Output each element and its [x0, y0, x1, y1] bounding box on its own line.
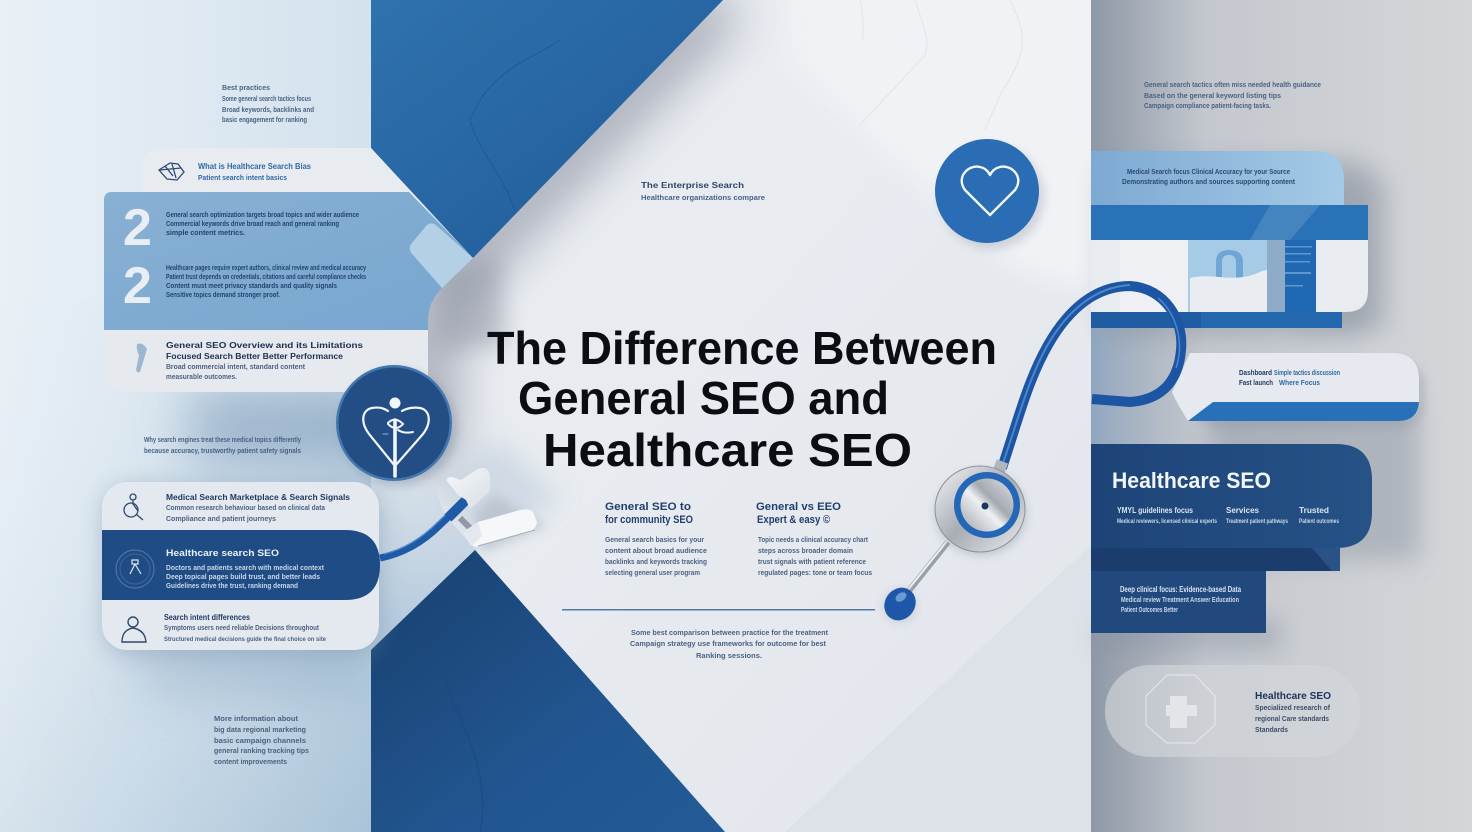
text block: left top note: Broad keywords, backlinks and	[222, 105, 314, 114]
text block: centre conclusion: Some best comparison between practice for the treatment	[631, 628, 828, 637]
panel: bottom right pale card: Specialized research of	[1255, 703, 1330, 712]
panel: healthcare SEO dark card: Patient Outcomes Better	[1121, 605, 1178, 614]
panel: bottom right pale card: Healthcare SEO	[1255, 691, 1331, 702]
row: healthcare SEO band: Deep topical pages build trust, and better leads	[166, 572, 320, 581]
text: lower paragraph	[166, 263, 367, 299]
divider line	[562, 609, 875, 610]
text block: left bottom note: More information about	[214, 714, 298, 723]
text block: centre top note	[641, 181, 765, 202]
text block: left bottom note: big data regional marketing	[214, 725, 306, 734]
column: healthcare SEO: Topic needs a clinical accuracy chart	[758, 535, 868, 544]
panel: healthcare SEO dark card: Healthcare SEO	[1112, 468, 1271, 493]
panel: healthcare SEO dark card: YMYL guidelines focus	[1117, 506, 1194, 515]
text block: left middle note	[144, 435, 302, 455]
panel: right dashboard card	[1172, 353, 1425, 428]
column: general SEO: for community SEO	[605, 514, 693, 526]
text: lower paragraph: Patient trust depends on credentials, citations and careful compliance checks	[166, 272, 366, 281]
column: healthcare SEO: Expert & easy ©	[757, 514, 830, 526]
text block: left bottom note: basic campaign channels	[214, 736, 306, 745]
panel: left white card with pen icon: measurable outcomes.	[166, 372, 237, 381]
row: healthcare SEO band: Doctors and patients search with medical context	[166, 563, 324, 572]
title: The Difference Between	[487, 322, 997, 374]
column: healthcare SEO: regulated pages: tone or team focus	[758, 568, 872, 577]
panel: right dashboard card: Fast launch	[1239, 378, 1273, 387]
text: lower paragraph: Healthcare pages require expert authors, clinical review and medical accuracy	[166, 263, 367, 272]
column: healthcare SEO	[756, 501, 872, 577]
panel: left blue number card	[104, 192, 473, 330]
icon: folded tab	[410, 224, 473, 288]
text block: left top note: Best practices	[222, 83, 270, 92]
column: healthcare SEO: steps across broader domain	[758, 546, 853, 555]
text block: centre top note: Healthcare organizations compare	[641, 193, 765, 202]
text block: right top note: Based on the general keyword listing tips	[1144, 91, 1281, 100]
text block: centre conclusion	[630, 628, 828, 660]
column: general SEO: selecting general user program	[605, 568, 700, 577]
panel: right browser card: Medical Search focus Clinical Accuracy for your Source	[1127, 167, 1290, 176]
text: lower paragraph: Sensitive topics demand stronger proof.	[166, 290, 280, 299]
panel: right dashboard card: Simple tactics discussion	[1274, 368, 1340, 377]
icon: stethoscope ear tips	[380, 468, 548, 558]
text block: left middle note: Why search engines treat these medical topics differently	[144, 435, 302, 444]
text block: right top note	[1144, 80, 1321, 110]
text block: left top note: basic engagement for ranking	[222, 115, 307, 124]
panel: centre paper	[371, 0, 1120, 832]
row: patient: Symptoms users need reliable Decisions throughout	[164, 623, 319, 632]
title	[487, 322, 997, 476]
text block: left bottom note: content improvements	[214, 757, 287, 766]
column: healthcare SEO: General vs EEO	[756, 501, 841, 513]
icon: badge	[159, 163, 184, 180]
row: healthcare SEO band: Healthcare search SEO	[166, 548, 280, 559]
text block: left top note	[222, 83, 314, 124]
number: 2: 2	[123, 199, 152, 257]
panel: bottom-left blue fold	[371, 550, 725, 832]
panel: right dashboard card: Where Focus	[1279, 378, 1320, 387]
title: General SEO and	[518, 372, 889, 424]
row: keyword research: Medical Search Marketplace & Search Signals	[166, 493, 350, 502]
panel: left white card with pen icon: Focused Search Better Better Performance	[166, 351, 343, 361]
row: keyword research	[124, 493, 350, 523]
panel: healthcare SEO dark card: Patient outcomes	[1299, 519, 1340, 525]
panel: right dashboard card: Dashboard	[1239, 368, 1272, 377]
icon: person with magnifier	[124, 494, 143, 520]
panel: healthcare SEO dark card: Services	[1226, 506, 1260, 515]
icon: heart circle	[935, 139, 1044, 249]
column: general SEO: content about broad audience	[605, 546, 707, 555]
panel: bottom right pale card: regional Care standards	[1255, 714, 1329, 723]
icon: person	[122, 617, 146, 642]
panel: right background	[1091, 0, 1472, 832]
panel: bottom right pale card	[1105, 665, 1360, 757]
panel: healthcare SEO dark card: Medical reviewers, licensed clinical experts	[1117, 519, 1218, 525]
text block: centre conclusion: Campaign strategy use frameworks for outcome for best	[630, 639, 826, 648]
row: keyword research: Common research behaviour based on clinical data	[166, 503, 326, 512]
panel: healthcare SEO dark card: Treatment patient pathways	[1226, 519, 1289, 525]
row: patient: Search intent differences	[164, 612, 250, 622]
text: upper paragraph: simple content metrics.	[166, 228, 245, 237]
row: keyword research: Compliance and patient journeys	[166, 514, 276, 523]
column: general SEO	[605, 501, 707, 577]
column: healthcare SEO: trust signals with patient reference	[758, 557, 866, 566]
text block: right top note: General search tactics often miss needed health guidance	[1144, 80, 1321, 89]
text block: left bottom note: general ranking tracking tips	[214, 746, 309, 755]
text: upper paragraph: General search optimization targets broad topics and wider audience	[166, 210, 359, 219]
panel: healthcare SEO dark card: Deep clinical focus: Evidence-based Data	[1120, 585, 1242, 594]
text block: centre top note: The Enterprise Search	[641, 181, 744, 190]
text block: left top note: Some general search tactics focus	[222, 94, 311, 103]
column: general SEO: backlinks and keywords tracking	[605, 557, 707, 566]
panel: right browser card: Demonstrating authors and sources supporting content	[1122, 177, 1295, 186]
icon: pen	[136, 344, 147, 372]
panel: healthcare SEO dark card: Medical review Treatment Answer Education	[1121, 595, 1239, 604]
icon: medical cross octagon	[1146, 675, 1215, 743]
text block: left middle note: because accuracy, trustworthy patient safety signals	[144, 446, 301, 455]
text block: right top note: Campaign compliance patient-facing tasks.	[1144, 101, 1271, 110]
icon: target person	[116, 550, 154, 588]
icon: stethoscope	[878, 285, 1181, 627]
text: upper paragraph: Commercial keywords drive broad reach and general ranking	[166, 219, 339, 228]
panel: left white card with pen icon	[104, 330, 428, 392]
row: patient	[122, 612, 326, 643]
text: lower paragraph: Content must meet privacy standards and quality signals	[166, 281, 337, 290]
panel: left background	[0, 0, 380, 832]
text: upper paragraph	[166, 210, 359, 237]
panel: left card with badge icon	[142, 148, 412, 193]
panel: right browser card	[1091, 151, 1375, 335]
icon: medical heart circle	[336, 365, 456, 486]
title: Healthcare SEO	[543, 424, 912, 476]
panel: healthcare SEO dark card	[1091, 444, 1372, 633]
text block: centre conclusion: Ranking sessions.	[696, 651, 762, 660]
panel: top-left blue fold	[371, 0, 723, 258]
panel: left white card with pen icon: Broad commercial intent, standard content	[166, 362, 305, 371]
panel: bottom right pale card: Standards	[1255, 725, 1288, 734]
panel: left white card with pen icon: General SEO Overview and its Limitations	[166, 340, 363, 350]
column: general SEO: General search basics for your	[605, 535, 704, 544]
panel: left card with badge icon: Patient search intent basics	[198, 173, 287, 182]
row: patient: Structured medical decisions guide the final choice on site	[164, 636, 326, 643]
number: 2 lower: 2	[123, 257, 152, 315]
panel: left card with badge icon: What is Healthcare Search Bias	[198, 162, 311, 171]
panel: left stacked card	[102, 482, 380, 654]
panel: healthcare SEO dark card: Trusted	[1299, 506, 1329, 515]
row: healthcare SEO band	[102, 530, 380, 600]
column: general SEO: General SEO to	[605, 501, 691, 513]
text block: left bottom note	[214, 714, 309, 766]
row: healthcare SEO band: Guidelines drive the trust, ranking demand	[166, 581, 298, 590]
